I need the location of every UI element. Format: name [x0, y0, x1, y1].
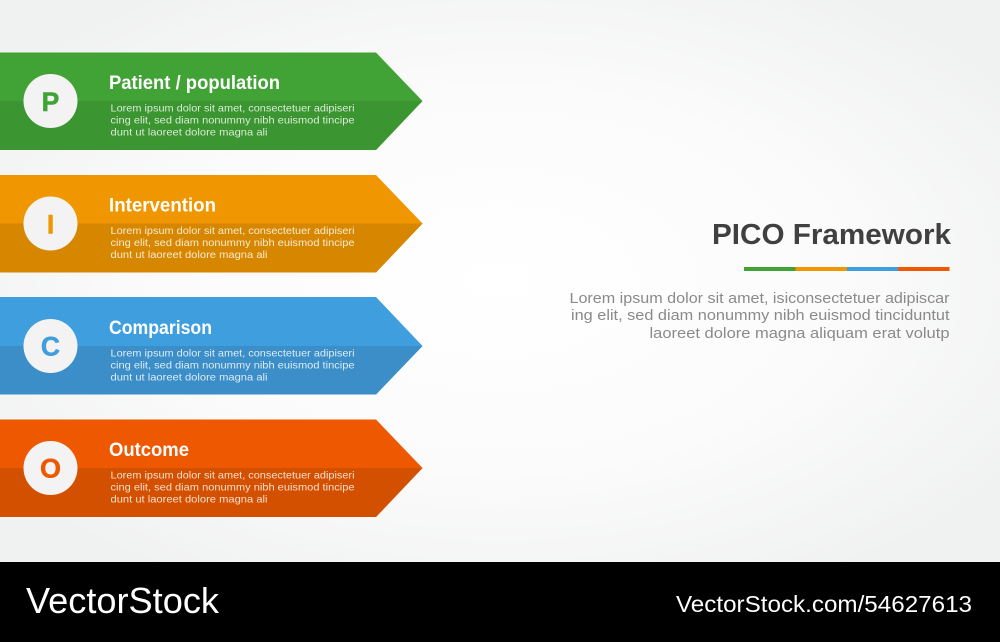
- text block: Intervention description: cing elit, sed diam nonummy nibh euismod tincipe: [110, 237, 355, 249]
- arrow lower shade: red-orange: [0, 468, 422, 517]
- text block: Outcome description: Lorem ipsum dolor sit amet, consectetuer adipiseri: [110, 470, 354, 482]
- icon: letter P circle: [24, 74, 78, 128]
- text block: Comparison description: cing elit, sed diam nonummy nibh euismod tincipe: [110, 360, 355, 372]
- icon: letter I circle: I: [47, 210, 54, 240]
- text block: Outcome description: [110, 470, 355, 506]
- arrow lower shade: orange: [0, 224, 422, 272]
- text block: framework description: laoreet dolore magna aliquam erat volutp: [650, 325, 950, 342]
- text block: Comparison description: dunt ut laoreet dolore magna ali: [110, 372, 268, 384]
- heading: Intervention: Intervention: [109, 196, 216, 216]
- arrow body: orange: [0, 175, 422, 272]
- text block: framework description: [570, 290, 950, 342]
- panel: Intervention arrow: [0, 175, 422, 272]
- arrow body: red-orange: [0, 420, 422, 517]
- text block: Intervention description: Lorem ipsum dolor sit amet, consectetuer adipiseri: [110, 225, 354, 237]
- text block: Outcome description: dunt ut laoreet dolore magna ali: [110, 494, 268, 506]
- text block: Intervention description: [110, 225, 355, 261]
- text block: Patient description: dunt ut laoreet dolore magna ali: [110, 126, 268, 138]
- heading: Comparison: Comparison: [109, 318, 212, 339]
- icon: letter I circle: [24, 196, 78, 250]
- text block: Comparison description: Lorem ipsum dolor sit amet, consectetuer adipiseri: [110, 348, 354, 360]
- text block: Intervention description: dunt ut laoreet dolore magna ali: [110, 249, 268, 261]
- icon: letter O circle: O: [40, 454, 61, 484]
- footer logo text: VectorStock: [26, 580, 220, 621]
- text block: framework description: ing elit, sed diam nonummy nibh euismod tinciduntut: [571, 307, 950, 324]
- heading: Outcome: Outcome: [109, 440, 189, 461]
- title: PICO Framework: [712, 219, 952, 251]
- colour bar: [744, 267, 950, 271]
- panel: Outcome arrow: [0, 420, 422, 517]
- icon: letter P circle: P: [42, 87, 59, 117]
- text block: Patient description: [110, 102, 355, 138]
- text block: Outcome description: cing elit, sed diam nonummy nibh euismod tincipe: [110, 482, 355, 494]
- footer image id: VectorStock.com/54627613: [676, 591, 972, 617]
- heading: Patient / population: Patient / population: [109, 73, 280, 94]
- footer bar: [0, 562, 1000, 642]
- arrow lower shade: green: [0, 101, 422, 150]
- text block: Patient description: cing elit, sed diam nonummy nibh euismod tincipe: [110, 114, 355, 126]
- panel: Patient / population arrow: [0, 52, 422, 150]
- arrow body: blue: [0, 297, 422, 394]
- icon: letter C circle: C: [41, 332, 60, 362]
- icon: letter C circle: [24, 319, 78, 373]
- text block: framework description: Lorem ipsum dolor sit amet, isiconsectetuer adipiscar: [570, 290, 950, 307]
- text block: Comparison description: [110, 348, 355, 384]
- text block: Patient description: Lorem ipsum dolor sit amet, consectetuer adipiseri: [110, 102, 354, 114]
- arrow lower shade: blue: [0, 346, 422, 394]
- panel: Comparison arrow: [0, 297, 422, 394]
- icon: letter O circle: [24, 441, 78, 495]
- arrow body: green: [0, 52, 422, 150]
